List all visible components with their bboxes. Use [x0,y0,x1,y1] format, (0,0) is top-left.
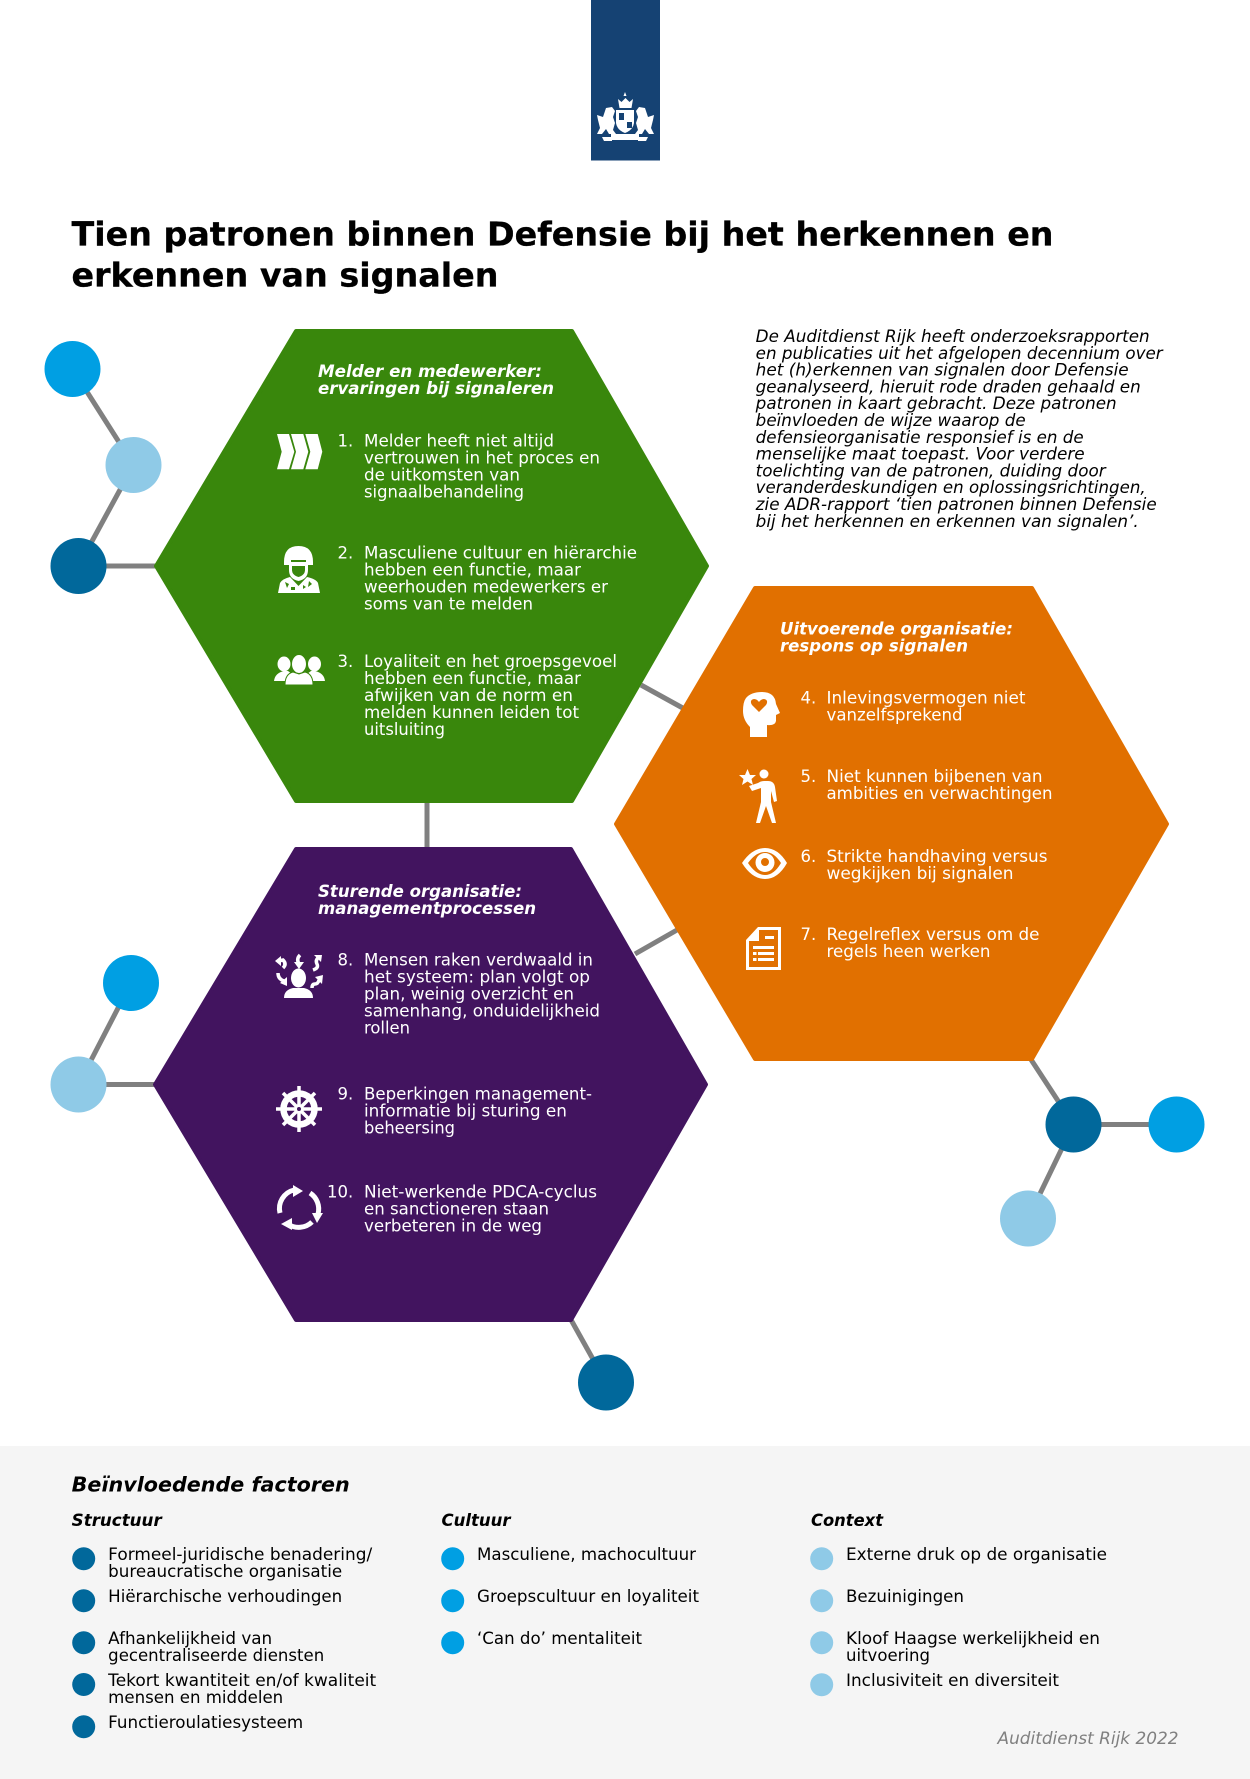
intro paragraph: patronen in kaart gebracht. Deze patronen [755,394,1117,413]
item 8: het systeem: plan volgt op [364,968,590,986]
icon: ship wheel [276,1086,322,1132]
column: structuur: Structuur [72,1511,163,1530]
intro paragraph: menselijke maat toepast. Voor verdere [756,445,1085,464]
intro paragraph: het (h)erkennen van signalen door Defensie [756,361,1129,380]
item 8 [338,950,600,1038]
item 5: Niet kunnen bijbenen van [826,767,1042,786]
item 3: afwijken van de norm en [364,686,573,705]
panel: sturende organisatie [155,849,706,1320]
icon: head with heart [743,692,780,737]
item 2: hebben een functie, maar [364,560,581,580]
item 10: 10. [327,1182,353,1202]
item 4: Inlevingsvermogen niet [826,688,1026,708]
column: context: uitvoering [846,1646,930,1665]
column: structuur: bureaucratische organisatie [108,1562,342,1581]
credit: Auditdienst Rijk 2022 [996,1729,1178,1748]
intro paragraph: veranderdeskundigen en oplossingsrichtingen, [756,478,1146,497]
heading green: ervaringen bij signaleren [318,379,554,398]
purple hexagon [155,849,706,1320]
item 3: hebben een functie, maar [364,669,581,688]
heading orange [780,620,1013,656]
footer background [0,1446,1250,1779]
intro paragraph: beïnvloeden de wijze waarop de [756,411,1026,430]
heading orange: respons op signalen [780,636,968,656]
node: bottom purple [578,1354,634,1410]
column: context: Bezuinigingen [846,1587,964,1606]
column: context: Context [811,1511,884,1530]
column: context [810,1511,1107,1696]
nodes: top left molecule [44,341,162,594]
item 6: 6. [800,847,816,866]
column: structuur: Functieroulatiesysteem [108,1713,303,1732]
column: context: Externe druk op de organisatie [846,1545,1107,1564]
intro paragraph: geanalyseerd, hieruit rode draden gehaald en [756,377,1141,396]
orange hexagon [616,588,1167,1059]
item 9: informatie bij sturing en [364,1102,567,1120]
item 8: samenhang, onduidelijkheid [364,1002,600,1020]
item 8: plan, weinig overzicht en [364,984,574,1004]
item 3 [338,652,617,739]
item 3: 3. [338,652,353,671]
column: cultuur [441,1511,700,1654]
heading green: Melder en medewerker: [318,362,542,381]
item 10: en sanctioneren staan [364,1200,549,1218]
item 1: Melder heeft niet altijd [364,432,554,450]
column: structuur: mensen en middelen [108,1688,283,1707]
icon: person with arrows [275,955,323,998]
column: cultuur: Cultuur [442,1511,511,1530]
heading green [318,362,554,398]
item 2: soms van te melden [364,594,533,614]
icon: person with star [739,769,777,823]
title: Tien patronen binnen Defensie bij het herkennen en [72,214,1054,254]
item 6: Strikte handhaving versus [826,847,1048,866]
item 2 [338,544,637,614]
column: structuur [72,1511,377,1738]
item 1: vertrouwen in het proces en [364,448,600,468]
item 1: signaalbehandeling [364,482,524,502]
panel: melder en medewerker [156,331,707,801]
column: structuur: Formeel-juridische benadering/ [108,1545,373,1564]
heading orange: Uitvoerende organisatie: [780,620,1013,638]
nodes: lower left molecule [50,955,159,1112]
column: cultuur: Groepscultuur en loyaliteit [477,1587,700,1606]
heading purple [318,882,536,918]
item 6: wegkijken bij signalen [826,864,1014,883]
intro paragraph: zie ADR-rapport ‘tien patronen binnen Defensie [755,495,1157,514]
intro paragraph: toelichting van de patronen, duiding door [756,461,1107,480]
connector lines between hexagons and nodes [72,369,1176,1382]
nodes: right molecule [1000,1096,1204,1246]
item 3: uitsluiting [364,720,445,739]
item 9 [338,1084,592,1138]
item 9: Beperkingen management- [364,1084,592,1104]
item 1: 1. [338,432,353,450]
item 10: verbeteren in de weg [364,1216,542,1236]
item 7: regels heen werken [826,942,990,961]
title: erkennen van signalen [72,256,498,294]
item 4: vanzelfsprekend [826,706,962,724]
heading purple: Sturende organisatie: [318,882,522,901]
item 8: rollen [364,1018,410,1038]
item 7: 7. [800,925,816,944]
column: cultuur: Masculiene, machocultuur [477,1545,696,1564]
item 8: Mensen raken verdwaald in [364,950,593,970]
intro paragraph: defensieorganisatie responsief is en de [756,428,1084,447]
title [72,214,1054,294]
item 4 [800,688,1026,724]
item 5 [800,767,1052,803]
item 9: beheersing [364,1118,455,1138]
item 2: weerhouden medewerkers er [364,578,608,596]
icon: soldier [278,546,320,593]
intro paragraph [755,327,1164,531]
icon: eye [742,848,787,879]
item 7 [800,925,1040,961]
column: context: Inclusiviteit en diversiteit [846,1671,1060,1690]
icon: group of people [274,654,325,685]
icon: document [746,927,781,970]
icon: chevrons [277,434,322,469]
item 9: 9. [338,1084,353,1104]
intro paragraph: De Auditdienst Rijk heeft onderzoeksrapporten [756,327,1150,346]
column: structuur: Hiërarchische verhoudingen [108,1587,342,1606]
item 4: 4. [800,688,816,708]
column: structuur: gecentraliseerde diensten [108,1646,324,1665]
column: structuur: Tekort kwantiteit en/of kwaliteit [107,1671,377,1690]
item 8: 8. [338,950,353,970]
item 3: melden kunnen leiden tot [364,703,580,722]
intro paragraph: en publicaties uit het afgelopen decennium over [756,344,1164,363]
item 1: de uitkomsten van [364,466,520,484]
column: cultuur: ‘Can do’ mentaliteit [477,1629,643,1648]
item 3: Loyaliteit en het groepsgevoel [364,652,617,671]
item 10 [327,1182,597,1236]
item 2: Masculiene cultuur en hiërarchie [364,544,637,562]
intro paragraph: bij het herkennen en erkennen van signalen’. [756,512,1139,531]
panel: uitvoerende organisatie [616,588,1167,1059]
icon: cycle arrows [279,1185,323,1230]
item 5: ambities en verwachtingen [826,784,1052,803]
item 6 [800,847,1048,883]
item 10: Niet-werkende PDCA-cyclus [364,1182,597,1202]
logo: Rijksoverheid blue ribbon with emblem [591,0,660,160]
footer heading: Beïnvloedende factoren [72,1472,350,1496]
item 5: 5. [800,767,816,786]
column: structuur: Afhankelijkheid van [108,1629,272,1648]
heading purple: managementprocessen [318,899,536,918]
item 7: Regelreflex versus om de [826,925,1040,944]
panel: beinvloedende factoren [0,1446,1250,1779]
item 2: 2. [338,544,353,562]
item 1 [338,432,600,502]
column: context: Kloof Haagse werkelijkheid en [846,1629,1100,1648]
green hexagon [156,331,707,801]
